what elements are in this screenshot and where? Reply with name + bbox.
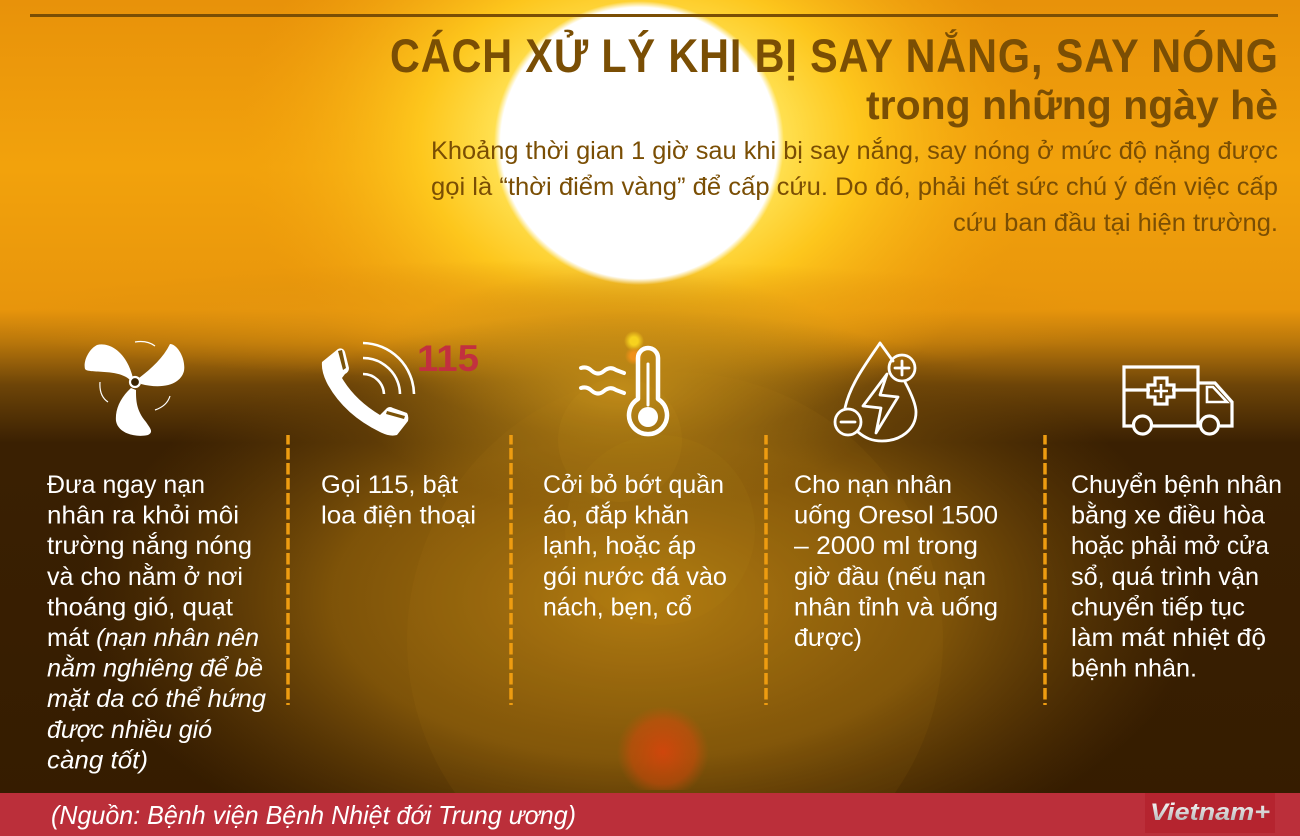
label: 115: 115 [417, 338, 479, 379]
step 1 text: và cho nằm ở nơi [47, 562, 243, 591]
step 1 text: càng tốt) [47, 746, 148, 774]
step 3 text: áo, đắp khăn [543, 501, 689, 530]
step 1 text: mát (nạn nhân nên [47, 624, 259, 652]
divider lines [288, 435, 1045, 705]
step 2 text: loa điện thoại [321, 502, 476, 530]
step 1 text: được nhiều gió [47, 716, 212, 744]
step 1 text: thoáng gió, quạt [47, 593, 233, 621]
icon: electrolyte drop [835, 343, 916, 441]
intro text: cứu ban đầu tại hiện trường. [953, 209, 1278, 237]
step 1 text: Đưa ngay nạn [47, 471, 205, 499]
step 5 text: bệnh nhân. [1071, 655, 1197, 683]
step 3 text: lạnh, hoặc áp [543, 532, 696, 560]
intro text [431, 136, 1278, 237]
title: CÁCH XỬ LÝ KHI BỊ SAY NẮNG, SAY NÓNG [390, 28, 1278, 83]
step 5 text: bằng xe điều hòa [1071, 501, 1265, 530]
step 1 text: trường nắng nóng [47, 531, 252, 560]
step 4 text: – 2000 ml trong [794, 532, 978, 560]
step 4 text: giờ đầu (nếu nạn [794, 563, 986, 591]
step 1 text: nhân ra khỏi môi [47, 502, 239, 530]
step 5 text [1071, 471, 1282, 683]
step 5 text: hoặc phải mở cửa [1071, 532, 1269, 560]
step 2 text: Gọi 115, bật [321, 471, 458, 499]
step 5 text: sổ, quá trình vận [1071, 563, 1259, 591]
footer bar [0, 793, 1300, 836]
step 3 text: nách, bẹn, cổ [543, 593, 692, 621]
step 3 text: Cởi bỏ bớt quần [543, 471, 724, 499]
title [390, 28, 1278, 128]
source text: (Nguồn: Bệnh viện Bệnh Nhiệt đới Trung ương) [51, 800, 576, 830]
step 4 text: uống Oresol 1500 [794, 502, 998, 530]
step 2 text [321, 471, 476, 530]
icon: fan [85, 342, 184, 436]
logo: Vietnam+: Vietnam+ [1150, 799, 1270, 826]
step 4 text: Cho nạn nhân [794, 471, 952, 499]
step 1 text: nằm nghiêng để bề [47, 654, 263, 683]
step 5 text: Chuyển bệnh nhân [1071, 471, 1282, 499]
icon: ambulance [1124, 367, 1232, 434]
icon: thermometer with heat waves [581, 348, 667, 434]
title: trong những ngày hè [866, 82, 1278, 128]
top rule [30, 14, 1278, 17]
step 4 text: nhân tỉnh và uống [794, 593, 998, 621]
step 1 text: mặt da có thể hứng [47, 685, 266, 713]
step 1 text [47, 471, 266, 774]
intro text: Khoảng thời gian 1 giờ sau khi bị say nắng, say nóng ở mức độ nặng được [431, 136, 1278, 165]
step 5 text: chuyển tiếp tục [1071, 593, 1245, 621]
step 3 text: gói nước đá vào [543, 563, 727, 591]
step 4 text: được) [794, 624, 862, 652]
step 4 text [794, 471, 998, 652]
intro text: gọi là “thời điểm vàng” để cấp cứu. Do đó, phải hết sức chú ý đến việc cấp [431, 173, 1278, 201]
step 3 text [543, 471, 727, 621]
step 5 text: làm mát nhiệt độ [1071, 624, 1266, 652]
icon: phone calling [322, 343, 414, 436]
